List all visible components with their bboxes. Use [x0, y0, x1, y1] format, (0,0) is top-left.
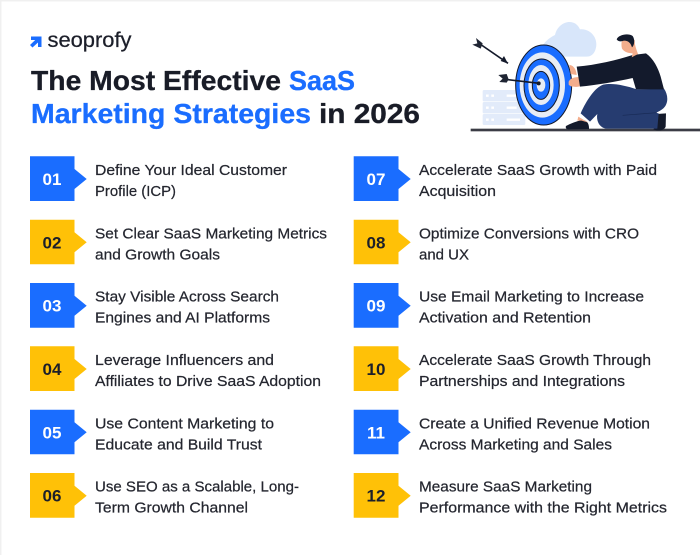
item 04: Leverage Influencers and	[95, 352, 274, 369]
item 11: Across Marketing and Sales	[419, 436, 612, 453]
item 09: 09	[367, 297, 385, 316]
item 10: 10	[367, 360, 385, 379]
item 12	[354, 473, 667, 518]
item 11: 11	[367, 423, 385, 442]
item 05: Educate and Build Trust	[95, 436, 263, 453]
icon: logo arrow	[30, 36, 42, 48]
item 02: Set Clear SaaS Marketing Metrics	[95, 225, 327, 242]
item 03	[30, 283, 279, 328]
item 04: Affiliates to Drive SaaS Adoption	[95, 373, 321, 390]
item 06	[30, 473, 299, 518]
item 02: and Growth Goals	[95, 246, 220, 263]
item 10: Partnerships and Integrations	[419, 373, 625, 390]
item 08: and UX	[419, 246, 469, 263]
strategy list: right column	[354, 156, 667, 518]
item 07: Accelerate SaaS Growth with Paid	[419, 162, 657, 179]
item 03: Stay Visible Across Search	[95, 289, 279, 306]
person hands	[569, 65, 582, 87]
item 04: 04	[43, 360, 62, 379]
title: SaaS	[289, 65, 355, 96]
person shoes	[566, 113, 666, 130]
person hair	[617, 34, 634, 47]
logo: seoprofy	[30, 29, 132, 52]
item 08: 08	[367, 233, 385, 252]
item 05: 05	[43, 423, 61, 442]
item 07	[354, 156, 657, 201]
item 10: Accelerate SaaS Growth Through	[419, 352, 651, 369]
item 07: 07	[367, 170, 385, 189]
title: The Most Effective	[31, 65, 281, 96]
item 09: Activation and Retention	[419, 310, 591, 327]
item 01: Define Your Ideal Customer	[95, 162, 287, 179]
item 03: 03	[43, 297, 61, 316]
person ankle	[577, 117, 588, 123]
item 04	[30, 346, 321, 391]
item 02: 02	[43, 233, 61, 252]
logo wordmark: seoprofy	[48, 29, 132, 52]
item 11: Create a Unified Revenue Motion	[419, 415, 650, 432]
item 07: Acquisition	[419, 183, 496, 200]
title	[31, 65, 420, 129]
ground line	[471, 129, 700, 131]
item 05: Use Content Marketing to	[95, 415, 274, 432]
strategy list: left column	[30, 156, 327, 518]
person torso and arm	[577, 53, 664, 89]
item 06: Use SEO as a Scalable, Long-	[95, 479, 299, 496]
item 12: Measure SaaS Marketing	[419, 479, 592, 496]
title: in 2026	[319, 98, 420, 129]
item 06: Term Growth Channel	[95, 500, 248, 517]
item 08	[354, 220, 639, 264]
person neck and face	[621, 36, 638, 57]
item 10	[354, 346, 651, 391]
item 09: Use Email Marketing to Increase	[419, 289, 644, 306]
item 06: 06	[43, 487, 61, 506]
title: Marketing Strategies	[31, 98, 311, 129]
arrow in target	[498, 74, 541, 85]
item 12: 12	[367, 487, 385, 506]
item 02	[30, 220, 327, 264]
item 01: 01	[43, 170, 61, 189]
icon: cloud	[540, 22, 596, 57]
item 09	[354, 283, 644, 328]
person legs	[581, 84, 667, 129]
item 12: Performance with the Right Metrics	[419, 500, 667, 517]
item 11	[354, 410, 650, 454]
icon: target	[516, 45, 572, 125]
item 01: Profile (ICP)	[95, 183, 176, 200]
arrow flying	[472, 38, 508, 64]
item 01	[30, 156, 287, 201]
item 05	[30, 410, 274, 454]
item 08: Optimize Conversions with CRO	[419, 225, 639, 242]
item 03: Engines and AI Platforms	[95, 310, 270, 327]
person	[566, 34, 667, 130]
illustration: person holding target with arrows	[471, 22, 700, 131]
icon: server stack	[483, 90, 525, 125]
